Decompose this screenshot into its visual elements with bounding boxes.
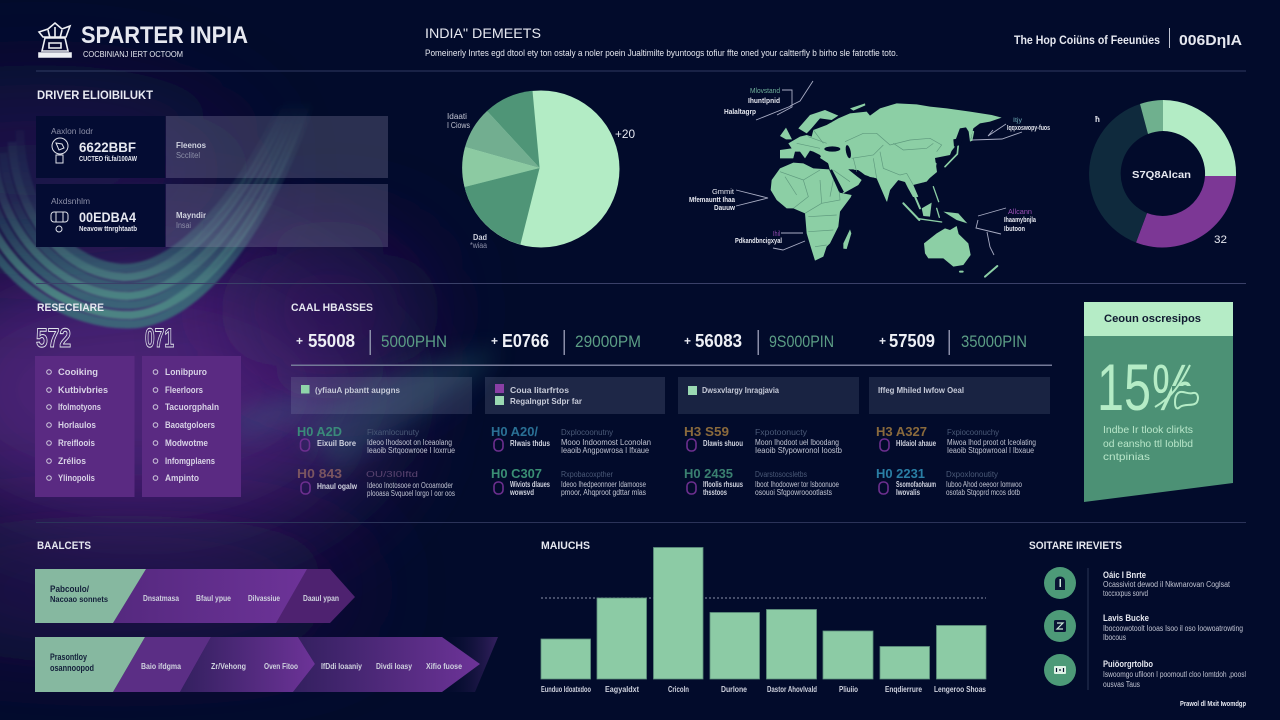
item: row 2 column 2: wowsvd	[509, 488, 534, 497]
icon: z box circle	[1044, 610, 1076, 642]
item: row 2 column 3: osouoi Sfqpowrooootlasts	[755, 488, 832, 497]
arrow row 1: Dilvassiue	[248, 594, 280, 603]
header right label: The Hop Coiüns of Feeunües	[1014, 33, 1160, 47]
bar labels: Cricoln	[668, 685, 689, 694]
stat row: 35000PIN	[961, 332, 1027, 351]
world map: Dauuw	[714, 205, 736, 212]
card 2: Neavow ttnrghtaatb	[79, 226, 137, 233]
list panel left: Cooiking	[58, 367, 98, 377]
list panel left: Kutbivbries	[58, 385, 108, 395]
pie label bottom: Dad	[473, 233, 487, 242]
list panel left: Ylinopolis	[58, 473, 95, 483]
seas and country borders	[780, 120, 963, 247]
arrow row 2: Oven Fitoo	[264, 662, 298, 671]
bar labels	[541, 685, 986, 694]
donut chart	[1089, 100, 1236, 247]
callout: 15 percent: cntpinias	[1103, 451, 1150, 463]
world map: Mfemauntt Ihaa	[689, 197, 735, 204]
list panel left	[35, 356, 134, 497]
arrow row 1	[35, 569, 355, 623]
review 1: Ocassiviot dewod il Nkwnarovan Coglsat	[1103, 580, 1231, 589]
world map: Mlovstand	[750, 88, 780, 95]
callout: 15 percent	[1084, 302, 1233, 502]
item: row 1 column 1: H0 A2D	[297, 424, 342, 439]
outlined number 1: 572	[36, 323, 71, 353]
review 3: Iswoomgo ufiloon I poomoutl cloo Iomtdoh ,poosl	[1103, 670, 1246, 679]
bar labels: Lengeroo Shoas	[934, 685, 986, 694]
panel: research	[35, 302, 241, 497]
item: row 1 column 4	[876, 424, 1036, 455]
arrow row 2: Zr/Vehong	[211, 662, 246, 671]
review 3: ousvas Taus	[1103, 680, 1140, 689]
legend boxes: Coua Iitarfrtos	[510, 385, 569, 395]
subtitle: COCBINIANJ IERT OCTOOM	[83, 50, 183, 59]
callout: 15 percent: od eansho ttl Ioblbd	[1103, 438, 1193, 450]
world map: Pdkandbncigxyal	[735, 238, 782, 245]
item: row 2 column 1: Ideoo Inotosooe on Ocoamoder	[367, 481, 453, 490]
item: row 2 column 2: Ideoo Ihedpeonnoer Idamoose	[561, 480, 646, 489]
header right label	[1014, 28, 1242, 49]
item: row 2 column 3: Dvarstosocsletbs	[755, 470, 807, 479]
donut centre label: S7Q8Alcan	[1132, 170, 1191, 181]
stat row: 9S000PIN	[769, 332, 834, 351]
heading: SOITARE IREVIETS	[1029, 540, 1122, 552]
bar labels: Eunduo Idoatxdoo	[541, 685, 591, 694]
item: row 1 column 3: Fxpotoonucty	[755, 428, 807, 437]
legend boxes: Dwsxvlargy Inragjavia	[702, 385, 779, 395]
header right label: 006DηIA	[1179, 32, 1242, 49]
pie label left	[447, 112, 470, 130]
item: row 1 column 3: Ieaoib Sfypowronol Ioostb	[755, 446, 843, 455]
review 3: Puiöorgrtolbo	[1103, 659, 1153, 669]
stat row: 55008	[308, 331, 355, 351]
world map: Ibutoon	[1004, 226, 1025, 233]
callout: 15 percent: 15	[1097, 350, 1151, 424]
list panel right: Modwotme	[165, 438, 208, 448]
arrow row 1: Daaul ypan	[303, 594, 339, 603]
callout: 15 percent: Indbe Ir tlook clirkts	[1103, 424, 1193, 436]
arrow row 2: Divdi Ioasy	[376, 662, 412, 671]
item: row 2 column 3: Ifloolis rhsuus	[703, 480, 743, 489]
list panel right: Baoatgoloers	[165, 420, 215, 430]
arrow row 1: Bfaul ypue	[196, 594, 231, 603]
item: row 2 column 2: Wiviots dlaues	[510, 480, 550, 489]
item: row 1 column 2: Ieaoib Angpowrosa I Ifxaue	[561, 446, 649, 455]
header: logo and title	[39, 22, 248, 59]
card 1: CUCTEO fiLfa/100AW	[79, 156, 137, 163]
item: row 2 column 4: H0 2231	[876, 466, 925, 481]
heading: DRIVER ELIOIBILUKT	[37, 88, 154, 102]
pie label left: I Ciows	[447, 121, 470, 130]
world map: Ihuntlpnid	[748, 98, 780, 105]
heading: India demeets: Pomeinerly Inrtes egd dtool ety ton ostaly a noler poein Jualtimilte byuntoogs tofiur ffte oned your caltterfly b birho sle fatrotfie toto.	[425, 48, 898, 58]
review 2: Ibocous	[1103, 633, 1126, 642]
item: row 1 column 3: Moon Ihodoot uel Iboodang	[755, 438, 839, 447]
bar labels: Eagyaldxt	[605, 685, 639, 694]
pie chart	[447, 90, 635, 250]
legend boxes: (yfiauA pbantt aupgns	[315, 385, 400, 395]
card 2: Insai	[176, 221, 191, 230]
outlined number 2: 071	[145, 323, 174, 353]
item: row 2 column 4: Ssomofaohaum	[896, 480, 936, 489]
list panel left: Horlaulos	[58, 420, 96, 430]
item: row 1 column 1: Ideoo Ihodsoot on Iceaolang	[367, 438, 452, 447]
panel: driver eligibility	[36, 88, 388, 247]
review 2: Lavis Bucke	[1103, 613, 1149, 623]
item: row 2 column 2	[491, 466, 646, 497]
world map: Allcann	[1008, 209, 1032, 216]
item: row 1 column 1	[297, 424, 455, 455]
stat row	[296, 330, 1027, 355]
stat row: +	[491, 334, 498, 348]
item: row 1 column 2: H0 A20/	[491, 424, 538, 439]
callout: 15 percent: %	[1152, 350, 1194, 424]
item: row 2 column 1	[297, 466, 455, 498]
review 1: toccxxpus sorvd	[1103, 589, 1148, 598]
item: row 2 column 1: pIooasa Svquoel Iorgo I oor oos	[367, 489, 455, 498]
item: row 1 column 1: Ieaoib Srtqoowrooe I Ioxrrue	[367, 446, 455, 455]
item: row 1 column 2: Mooo Indoomost Lconolan	[561, 438, 651, 447]
legend boxes: Regalngpt Sdpr far	[510, 396, 583, 406]
review 1: Oáic I Bnrte	[1103, 570, 1146, 580]
bars	[541, 548, 986, 679]
arrow row 1: Pabcoulo/	[50, 584, 89, 594]
list panel right: Ampinto	[165, 473, 199, 483]
item: row 2 column 4: Iwovalis	[896, 488, 920, 497]
heading: BAALCETS	[37, 540, 91, 552]
icon: vehicle	[51, 212, 68, 232]
item: row 1 column 2: Rlwais thdus	[510, 439, 550, 448]
item: row 1 column 4: Ieaoib Stqpowrooal I Ibxaue	[947, 446, 1034, 455]
heading: MAIUCHS	[541, 540, 590, 552]
stat row: E0766	[502, 331, 549, 351]
card 2: 00EDBA4	[79, 209, 136, 225]
list panel right: Tacuorgphaln	[165, 402, 219, 412]
arrow row 2: Prasontloy	[50, 652, 87, 662]
item: row 1 column 2	[491, 424, 651, 455]
landmass asia block	[820, 120, 960, 202]
list panel right: Fleerloors	[165, 385, 203, 395]
card 2: Mayndir	[176, 211, 206, 220]
bar labels: Enqdierrure	[885, 685, 922, 694]
list panel left: Ifolmotyons	[58, 402, 101, 412]
heading: India demeets: INDIA" DEMEETS	[425, 25, 541, 41]
stat row: +	[879, 334, 886, 348]
world map: Halaltagrp	[724, 109, 756, 116]
review 3	[1103, 659, 1246, 689]
world map: Gmmit	[712, 189, 734, 196]
arrow row 2	[35, 637, 498, 692]
item: row 2 column 3: thsstoos	[703, 488, 727, 497]
review 2: Ibocoowotoolt Iooas Isoo il oso Ioowoatrowting	[1103, 624, 1243, 633]
pie label left: Idaati	[447, 112, 467, 121]
item: row 2 column 1: H0 843	[297, 466, 342, 481]
donut chart: 32	[1214, 234, 1227, 246]
icon: emblem	[39, 23, 71, 57]
list panel right: Infomgplaens	[165, 456, 215, 466]
world map: Ihaamybnjla	[1004, 217, 1036, 224]
world map: Ihil	[773, 231, 780, 238]
footnote: Prawol dl Mxit Iwomdgp	[1180, 701, 1246, 708]
bar labels: Pliuiio	[839, 685, 858, 694]
world map	[689, 81, 1050, 277]
arrow row 2: IfDdi Ioaaniy	[321, 662, 362, 671]
item: row 1 column 3	[684, 424, 843, 455]
card 1	[36, 116, 388, 178]
item: row 1 column 1: Eixuil Bore	[317, 439, 357, 448]
card 2	[36, 184, 388, 247]
item: row 2 column 3: H0 2435	[684, 466, 733, 481]
stat row: 5000PHN	[381, 332, 447, 351]
panel: bar chart	[541, 540, 986, 694]
item: row 2 column 3: Iboot Ihodoower tor Isboonuoe	[755, 480, 839, 489]
item: row 1 column 1: Fixamlocunuty	[367, 428, 419, 437]
pie label value: +20	[615, 127, 635, 141]
world map: Iqqxoswopy-fuos	[1007, 125, 1050, 132]
panel: software reviews	[1029, 540, 1246, 708]
map callouts	[736, 81, 1022, 255]
arrow row 1: Nacoao sonnets	[50, 594, 108, 604]
stat row: +	[296, 334, 303, 348]
pie label bottom	[470, 233, 487, 250]
list panel right	[142, 356, 241, 497]
card 1: 6622BBF	[79, 139, 136, 155]
arrow row 2: Baio ifdgma	[141, 662, 181, 671]
list panel left: Zrélios	[58, 456, 86, 466]
icon: card circle	[1044, 654, 1076, 686]
world map: Itjy	[1013, 118, 1022, 124]
icon: globe	[52, 138, 68, 163]
item: row 1 column 4: Hldaiol ahaue	[896, 439, 936, 448]
item: row 1 column 3: H3 S59	[684, 424, 729, 439]
item: row 2 column 1: Hnaul ogalw	[317, 482, 358, 491]
item: row 2 column 3	[684, 466, 839, 497]
item: row 1 column 4: Miwoa Ihod proot ot Iceolating	[947, 438, 1036, 447]
item: row 2 column 4: osotab Stqoprd mcos dotb	[946, 488, 1020, 497]
item: row 2 column 4: Iuboo Ahod oeeoor Iomwoo	[946, 480, 1022, 489]
list panel right: Lonibpuro	[165, 367, 207, 377]
stat row: 57509	[889, 331, 935, 351]
item: row 1 column 4: Fxpiocoonuchy	[947, 428, 999, 437]
item: row 2 column 2: Rxpobacoxpther	[561, 470, 613, 479]
card 1: Aaxlon Iodr	[51, 127, 93, 136]
heading: India demeets	[425, 25, 898, 58]
item: row 1 column 4: H3 A327	[876, 424, 927, 439]
pie label bottom: *wiaa	[470, 241, 487, 250]
item: row 2 column 1: OU/3I0Iftd	[366, 470, 418, 479]
card 1: Fleenos	[176, 141, 207, 150]
legend boxes: Iffeg Mhiled Iwfow Oeal	[878, 385, 964, 395]
bar labels: Dastor Ahovlvald	[767, 685, 817, 694]
item: row 2 column 4	[876, 466, 1022, 497]
arrow row 1: Dnsatmasa	[143, 594, 179, 603]
item: row 1 column 3: Dlawis shuou	[703, 439, 743, 448]
review 2	[1103, 613, 1243, 642]
legend boxes	[291, 377, 1050, 414]
review 1	[1103, 570, 1231, 598]
heading: CAAL HBASSES	[291, 302, 373, 314]
stat row: +	[684, 334, 691, 348]
bar labels: Durlone	[721, 685, 747, 694]
title: SPARTER INPIA	[81, 22, 248, 49]
list panel left: Rreifloois	[58, 438, 95, 448]
panel: budgets arrows	[35, 540, 498, 692]
item: row 2 column 2: H0 C307	[491, 466, 542, 481]
heading: RESECEIARE	[37, 302, 104, 314]
card 1: Scclitel	[176, 151, 200, 160]
icon: bell circle	[1044, 567, 1076, 599]
card 2: Alxdsnhlm	[51, 197, 90, 206]
item: row 2 column 4: Dxpoxlonoutity	[946, 470, 998, 479]
landmass west and north	[771, 103, 1002, 277]
panel: call phases	[291, 302, 1052, 498]
item: row 2 column 2: pmoor, Ahqproot gdttar mlas	[561, 488, 646, 497]
donut labels: ħ	[1095, 115, 1100, 124]
arrow row 2: osannoopod	[50, 663, 94, 673]
item: row 1 column 2: Dxplocoonutny	[561, 428, 613, 437]
stat row: 56083	[695, 331, 742, 351]
arrow row 2: Xifio fuose	[426, 662, 462, 671]
stat row: 29000PM	[575, 332, 641, 351]
callout: 15 percent: Ceoun oscresipos	[1104, 313, 1201, 325]
